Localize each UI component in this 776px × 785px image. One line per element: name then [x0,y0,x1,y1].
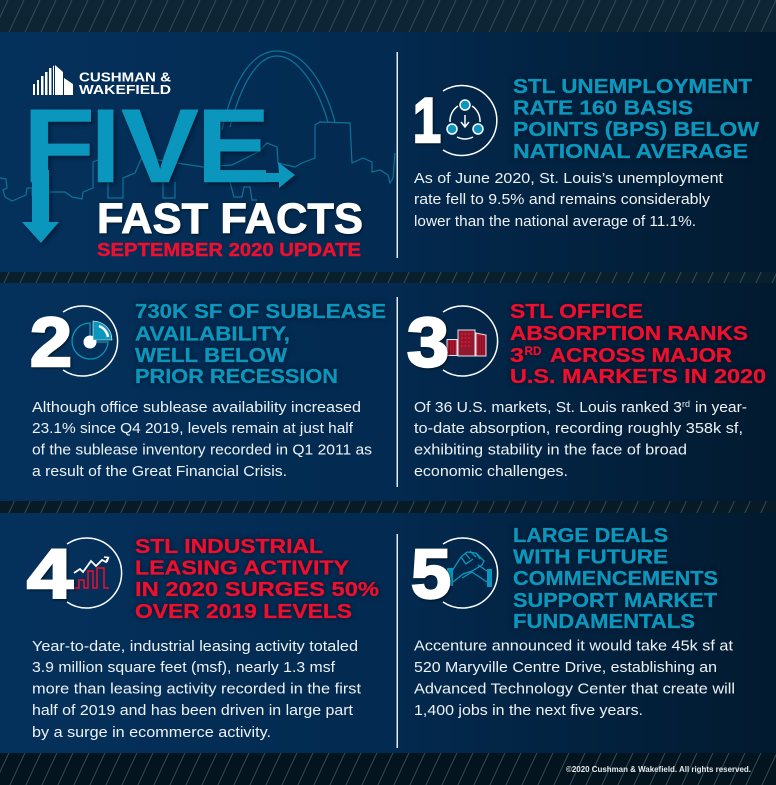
heading 1 [513,76,759,163]
body 5: Advanced Technology Center that create will [414,680,735,698]
body 4: by a surge in ecommerce activity. [32,724,271,741]
body 1: As of June 2020, St. Louis’s unemployment [414,170,724,187]
icon: ring with network [443,85,497,155]
body 4: Year-to-date, industrial leasing activity totaled [32,638,358,655]
heading 5: FUNDAMENTALS [513,611,695,633]
heading 3: U.S. MARKETS IN 2020 [510,366,766,388]
heading 3: 3 [510,345,524,367]
body 3: economic challenges. [414,463,568,480]
heading 5 [513,525,718,633]
number 3: 3 [407,303,449,381]
panel: title band [0,32,776,272]
title: FIVE: F [23,88,95,205]
heading 2: 730K SF OF SUBLEASE [135,301,386,323]
body 1 [414,170,724,230]
icon: ring with growth chart [67,538,122,608]
heading 2: WELL BELOW [135,345,287,367]
heading 1: POINTS (BPS) BELOW [513,119,759,141]
heading 1: NATIONAL AVERAGE [513,141,748,163]
heading 4: STL INDUSTRIAL [135,536,323,558]
body 5 [414,638,735,719]
number 4: 4 [27,535,73,613]
skyline [0,51,395,201]
logo text: CUSHMAN & [79,70,171,84]
panel: facts 4 and 5 [0,513,776,753]
body 3: to-date absorption, recording roughly 358k sf, [414,420,743,437]
heading 1: STL UNEMPLOYMENT [513,76,752,98]
body 2: 23.1% since Q4 2019, levels remain at just half [32,420,354,437]
icon: ring with clasped hands [443,538,498,608]
body 3: exhibiting stability in the face of broad [414,442,687,458]
body 5: 520 Maryville Centre Drive, establishing an [414,659,717,676]
heading 3: RD [524,344,542,358]
body 2 [32,399,372,480]
fact 1 [413,76,759,230]
fact 4 [27,535,379,741]
body 2: of the sublease inventory recorded in Q1 2011 as [32,442,372,458]
body 4: 3.9 million square feet (msf), nearly 1.3 msf [32,659,336,676]
logo: Cushman & Wakefield [33,65,171,97]
heading 3: ABSORPTION RANKS [510,323,748,345]
body 4: half of 2019 and has been driven in large part [32,702,354,719]
number 2: 2 [30,303,72,381]
heading 3: ACROSS MAJOR [550,345,733,367]
heading 2: AVAILABILITY, [135,324,290,346]
heading 1: RATE 160 BASIS [513,98,693,120]
body 4 [32,638,362,741]
fact 2 [30,301,386,480]
title: FIVE: V [121,88,199,205]
heading 5: COMMENCEMENTS [513,568,718,590]
fact 5 [411,525,735,719]
title: FIVE: I [91,88,120,205]
heading 4: LEASING ACTIVITY [135,558,350,580]
heading 2 [135,301,386,388]
heading 3: STL OFFICE [510,301,643,323]
body 3: in year- [695,399,747,416]
panel: facts 2 and 3 [0,283,776,501]
body 3: Of 36 U.S. markets, St. Louis ranked 3 [414,399,682,416]
logo text: WAKEFIELD [79,82,171,97]
title: FIVE [22,88,295,243]
heading 3 [510,301,766,388]
number 5: 5 [411,535,451,613]
icon: ring with buildings [443,306,498,376]
heading 5: LARGE DEALS [513,525,668,547]
title: FIVE: E [197,88,270,205]
heading 4 [135,536,379,623]
heading 5: WITH FUTURE [513,546,668,568]
logo text [79,70,171,97]
fact 3 [407,301,766,480]
title: FAST FACTS: FAST FACTS [97,195,363,243]
heading 4: OVER 2019 LEVELS [135,601,352,623]
icon: building mark [33,65,73,95]
heading 5: SUPPORT MARKET [513,590,717,612]
body 1: rate fell to 9.5% and remains considerably [414,191,711,208]
icon: ring with pie [63,306,118,376]
subtitle: September 2020 update: SEPTEMBER 2020 UPDATE [97,240,361,260]
body 4: more than leasing activity recorded in the first [32,680,362,698]
body 2: Although office sublease availability increased [32,399,361,416]
body 3: rd [682,399,690,409]
body 2: a result of the Great Financial Crisis. [32,463,287,480]
body 5: 1,400 jobs in the next five years. [414,702,643,719]
heading 2: PRIOR RECESSION [135,366,338,388]
body 5: Accenture announced it would take 45k sf at [414,638,734,654]
footer copyright: ©2020 Cushman & Wakefield. All rights reserved. [566,765,751,774]
body 3 [414,399,747,480]
body 1: lower than the national average of 11.1%. [414,213,696,230]
heading 4: IN 2020 SURGES 50% [135,579,379,601]
number 1: 1 [413,86,441,156]
